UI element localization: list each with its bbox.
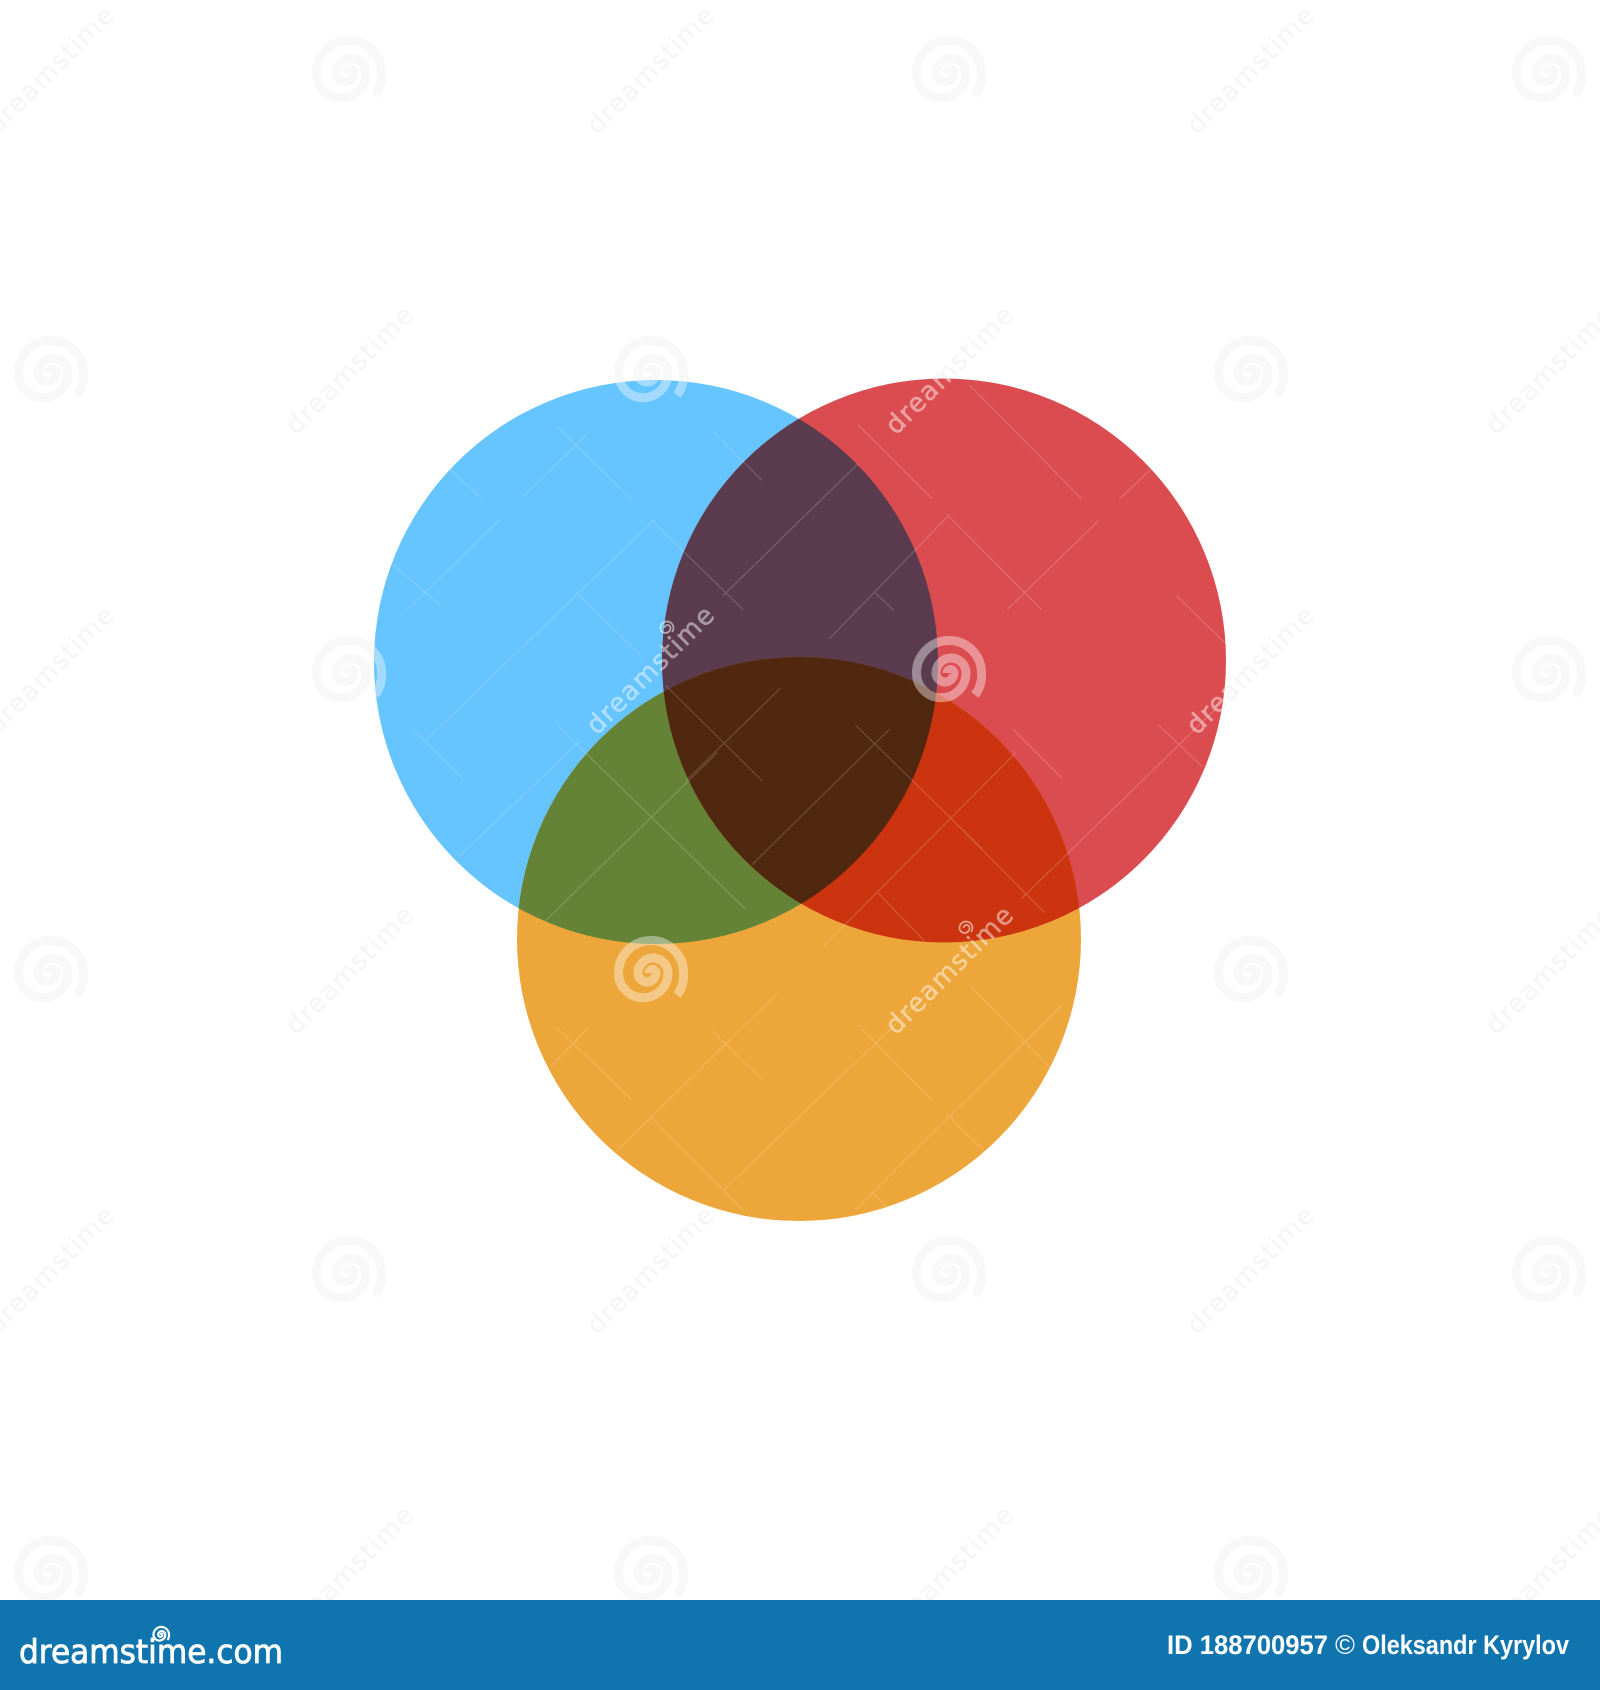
faint watermark pattern on white: dreamstime <box>880 301 1020 441</box>
faint watermark pattern on white: dreamstime <box>280 901 420 1041</box>
faint watermark pattern on white: dreamstime <box>1181 1201 1321 1341</box>
faint watermark pattern on white: dreamstime <box>581 1 721 141</box>
footer band <box>0 1600 1600 1690</box>
footer credit text: © <box>1335 1630 1355 1660</box>
overlap: red and orange (vermilion) <box>664 657 1080 942</box>
footer credit text <box>1167 1630 1569 1660</box>
icon: footer logo spiral <box>153 1627 169 1641</box>
circle: red <box>662 378 1226 942</box>
faint watermark pattern on white: dreamstime <box>280 301 420 441</box>
footer credit text: ID 188700957 <box>1167 1630 1328 1660</box>
circle: orange <box>517 657 1081 1221</box>
faint watermark pattern on white: dreamstime <box>280 1501 420 1641</box>
watermark overlay on circles: dreamstime <box>1181 601 1321 741</box>
venn diagram: three overlapping circles <box>374 378 1226 1221</box>
faint watermark pattern on white: dreamstime <box>581 1201 721 1341</box>
faint watermark pattern on white: dreamstime <box>880 1501 1020 1641</box>
overlap: blue and orange (green) <box>518 657 936 944</box>
watermark overlay on circles <box>374 378 1226 1210</box>
watermark overlay on circles: dreamstime <box>581 601 721 741</box>
watermark overlay on circles: dreamstime <box>880 901 1020 1041</box>
faint watermark pattern on white: dreamstime <box>1181 1 1321 141</box>
watermark overlay on circles: dreamstime <box>880 301 1020 441</box>
circle: blue <box>374 380 938 944</box>
faint watermark pattern on white: dreamstime <box>1181 601 1321 741</box>
overlap: blue and red (plum) <box>662 418 938 692</box>
footer logo text: dreamstime.com <box>19 1632 283 1671</box>
overlap: all three (dark brown) <box>664 657 936 904</box>
footer credit text: Oleksandr Kyrylov <box>1362 1630 1569 1660</box>
